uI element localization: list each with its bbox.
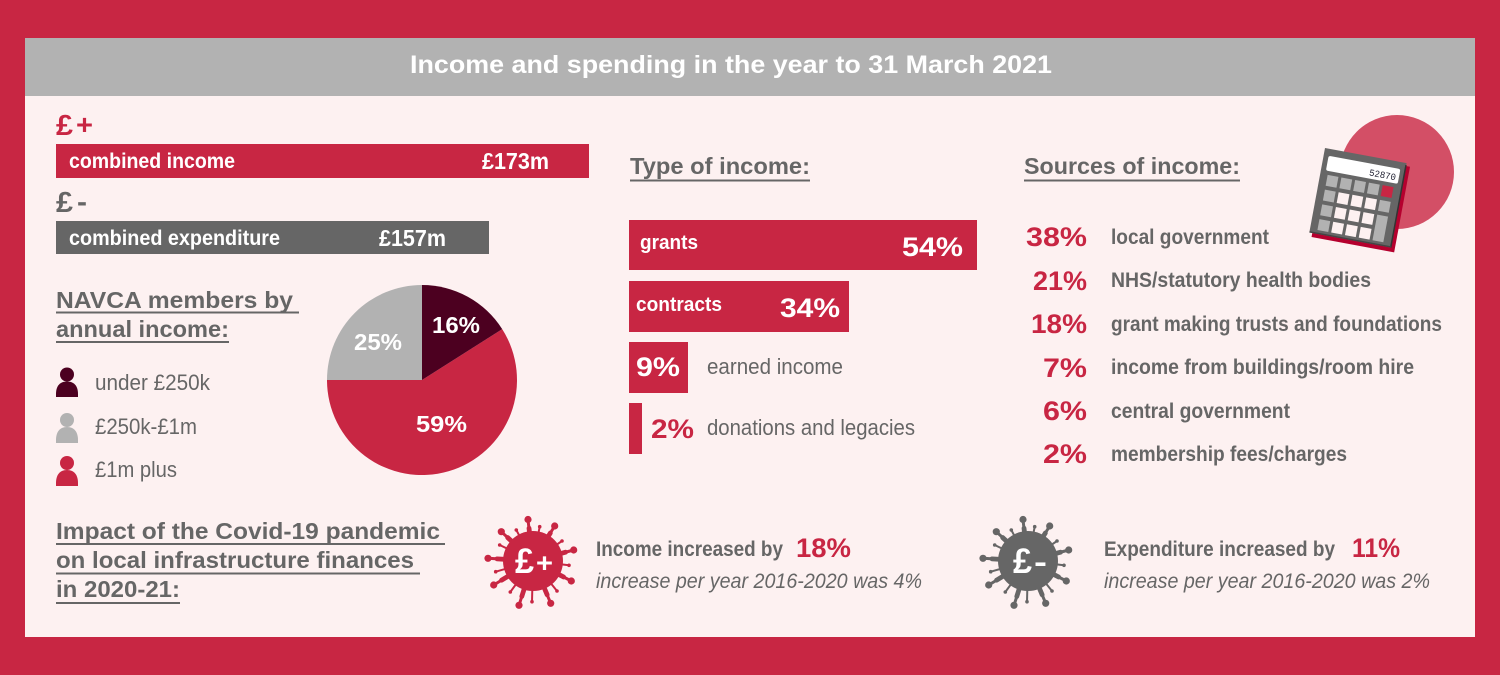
panel: income and expenditure totals <box>56 109 589 254</box>
row: local government: 38% <box>1026 222 1087 252</box>
row: local government: local government <box>1111 226 1269 249</box>
callout: income increased <box>596 533 922 593</box>
row: income from buildings/room hire: 7% <box>1043 353 1087 383</box>
icon: virus with pound plus: + <box>536 548 553 578</box>
row: central government <box>1043 396 1290 426</box>
row: membership fees/charges: membership fees/charges <box>1111 443 1347 466</box>
header band with title <box>25 38 1475 96</box>
icon: calculator on circle: 52870 <box>1368 168 1397 183</box>
row: local government <box>1026 222 1269 252</box>
bar: earned income: earned income <box>707 354 843 379</box>
row: grant making trusts and foundations <box>1031 309 1442 339</box>
row: NHS/statutory health bodies <box>1033 266 1371 296</box>
bar: combined expenditure <box>56 221 489 254</box>
pie chart: members by annual income <box>327 285 517 475</box>
bar: contracts: 34% <box>780 293 840 323</box>
pie chart: members by annual income: 16% <box>432 312 480 338</box>
heading: impact of the Covid-19 pandemic: Impact of the Covid-19 pandemic <box>56 518 440 544</box>
row: membership fees/charges <box>1043 439 1347 469</box>
icon: person under £250k <box>56 368 78 397</box>
icon: virus with pound minus: £ <box>1013 542 1033 581</box>
callout: income increased: increase per year 2016-2020 was 4% <box>596 570 922 593</box>
callout: expenditure increased: increase per year 2016-2020 was 2% <box>1104 570 1430 593</box>
panel: sources of income <box>1024 115 1454 469</box>
header band with title: Income and spending in the year to 31 March 2021 <box>410 51 1052 79</box>
icon: pound minus <box>56 186 87 219</box>
bar: combined income: £173m <box>482 148 549 174</box>
bar: combined income <box>56 144 589 178</box>
heading: type of income: Type of income: <box>630 153 810 179</box>
row: grant making trusts and foundations: grant making trusts and foundations <box>1111 313 1442 336</box>
icon: person £250k-£1m <box>56 413 78 443</box>
legend label: £250k-£1m: £250k-£1m <box>95 414 197 439</box>
bar: earned income <box>629 342 843 393</box>
icon: virus with pound plus <box>484 516 577 609</box>
icon: virus with pound minus <box>979 516 1072 609</box>
heading: impact of the Covid-19 pandemic: in 2020-21: <box>56 576 180 602</box>
icon: calculator on circle <box>1309 115 1454 252</box>
icon: pound plus <box>56 109 93 142</box>
legend label: under £250k: under £250k <box>95 370 211 395</box>
callout: expenditure increased <box>1104 533 1430 593</box>
heading: NAVCA members by annual income <box>56 287 299 342</box>
callout: expenditure increased: 11% <box>1352 533 1400 563</box>
heading: impact of the Covid-19 pandemic: on local infrastructure finances <box>56 547 414 573</box>
bar: combined income: combined income <box>69 150 235 173</box>
legend: annual income bands <box>56 368 211 486</box>
pie chart: members by annual income: 59% <box>416 411 467 437</box>
callout: income increased: 18% <box>796 533 851 563</box>
icon: virus with pound minus: - <box>1034 546 1047 579</box>
icon: pound plus: £ <box>56 110 73 142</box>
row: income from buildings/room hire <box>1043 353 1414 383</box>
icon: virus with pound plus: £ <box>515 542 535 581</box>
icon: pound plus: + <box>76 109 93 140</box>
heading: impact of the Covid-19 pandemic <box>56 518 445 603</box>
bar: donations and legacies <box>629 403 915 454</box>
row: central government: central government <box>1111 400 1290 423</box>
bar: earned income: 9% <box>636 352 680 382</box>
bar: grants: grants <box>640 232 698 254</box>
heading: sources of income: Sources of income: <box>1024 153 1240 179</box>
bar: grants: 54% <box>902 232 963 262</box>
icon: pound minus: - <box>77 186 87 217</box>
heading: NAVCA members by annual income: annual income: <box>56 316 229 342</box>
row: central government: 6% <box>1043 396 1087 426</box>
bar: donations and legacies: 2% <box>651 414 694 444</box>
bar: grants <box>629 220 977 270</box>
row: membership fees/charges: 2% <box>1043 439 1087 469</box>
pie chart: members by annual income: 25% <box>354 329 402 355</box>
row: income from buildings/room hire: income from buildings/room hire <box>1111 356 1414 379</box>
legend label: £1m plus: £1m plus <box>95 457 177 482</box>
bar: combined expenditure: combined expenditure <box>69 227 280 250</box>
bar: contracts: contracts <box>636 294 722 316</box>
heading: NAVCA members by annual income: NAVCA members by <box>56 287 293 313</box>
callout: expenditure increased: Expenditure increased by <box>1104 538 1335 561</box>
row: grant making trusts and foundations: 18% <box>1031 309 1087 339</box>
callout: income increased: Income increased by <box>596 538 783 561</box>
panel: type of income <box>629 153 977 454</box>
row: NHS/statutory health bodies: NHS/statutory health bodies <box>1111 269 1371 292</box>
bar: donations and legacies: donations and legacies <box>707 415 915 440</box>
bar: contracts <box>629 281 849 332</box>
bar: combined expenditure: £157m <box>379 225 446 251</box>
icon: pound minus: £ <box>56 187 73 219</box>
icon: person £1m plus <box>56 456 78 486</box>
row: NHS/statutory health bodies: 21% <box>1033 266 1087 296</box>
